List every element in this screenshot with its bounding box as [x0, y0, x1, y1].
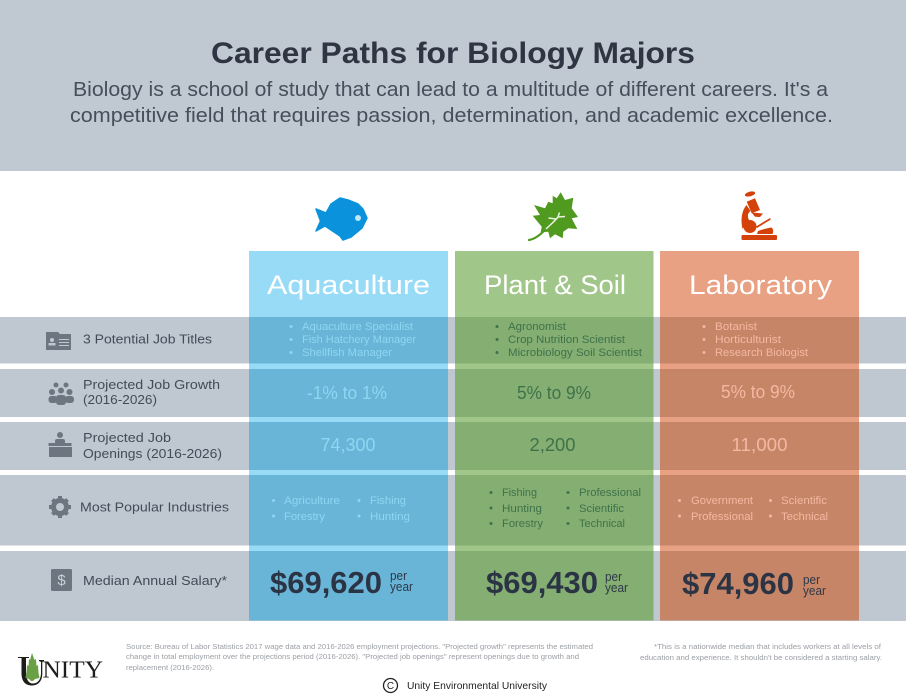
- icon: id card: [46, 332, 71, 350]
- row label: job growth: Projected Job Growth: [83, 377, 220, 392]
- source note: Source: Bureau of Labor Statistics 2017 wage data and 2016-2026 employment projections. "Projected growth" represents the estimated: [126, 642, 593, 651]
- panel: header band: [0, 0, 906, 171]
- intro text: [70, 79, 833, 127]
- industries: laboratory: Government: [691, 495, 753, 507]
- industries: aquaculture: Hunting: [370, 511, 410, 523]
- salary: laboratory: $74,960: [682, 566, 794, 601]
- industries: plant and soil: [490, 487, 641, 530]
- icon: microscope: [742, 190, 777, 240]
- icon: pine tree: [26, 653, 40, 681]
- row label: job titles: [46, 332, 213, 350]
- row label: industries: [49, 496, 230, 518]
- job growth: laboratory: 5% to 9%: [721, 382, 795, 402]
- heading: aquaculture: Aquaculture: [267, 270, 430, 300]
- job openings: aquaculture: 74,300: [320, 435, 376, 455]
- panel: comparison row bands: [0, 317, 906, 621]
- industries: aquaculture: [272, 495, 410, 523]
- row label: industries: Most Popular Industries: [80, 500, 230, 514]
- title: Career Paths for Biology Majors: [211, 37, 695, 70]
- job titles: plant and soil: Agronomist: [508, 321, 566, 333]
- industries: aquaculture: Agriculture: [284, 495, 340, 507]
- industries: laboratory: [678, 495, 828, 523]
- industries: plant and soil: Professional: [579, 487, 641, 499]
- industries: plant and soil: Forestry: [502, 518, 544, 530]
- copyright credit: C: [387, 681, 394, 692]
- row label: job growth: [48, 377, 220, 407]
- industries: laboratory: Technical: [781, 511, 828, 523]
- source note: replacement (2016-2026).: [126, 663, 214, 672]
- logo: Unity: [18, 653, 103, 686]
- salary: plant and soil: $69,430: [486, 565, 598, 600]
- job titles: laboratory: [702, 321, 808, 359]
- industries: plant and soil: Fishing: [502, 487, 537, 499]
- salary: plant and soil: year: [605, 581, 628, 595]
- job titles: plant and soil: Microbiology Soil Scientist: [508, 347, 642, 359]
- job titles: aquaculture: Shellfish Manager: [302, 347, 392, 359]
- industries: plant and soil: Scientific: [579, 503, 624, 515]
- industries: aquaculture: Forestry: [284, 511, 326, 523]
- icon: person at desk: [48, 432, 72, 457]
- panel: laboratory column: [660, 251, 859, 620]
- job openings: plant and soil: 2,200: [530, 435, 576, 455]
- salary: plant and soil: per: [605, 570, 622, 584]
- icon: maple leaf: [529, 192, 578, 240]
- salary: aquaculture: per: [390, 569, 407, 583]
- icon: fish: [316, 198, 367, 240]
- job titles: plant and soil: [496, 321, 642, 359]
- job openings: laboratory: 11,000: [732, 435, 788, 455]
- icon: people group: [48, 382, 74, 405]
- industries: laboratory: Professional: [691, 511, 753, 523]
- salary footnote: *This is a nationwide median that includes workers at all levels of: [654, 642, 882, 651]
- icon: U letter: [18, 657, 44, 686]
- job titles: laboratory: Botanist: [715, 321, 757, 333]
- salary: laboratory: per: [803, 573, 820, 587]
- salary footnote: [640, 642, 882, 662]
- heading: plant and soil: Plant & Soil: [484, 270, 626, 300]
- industries: aquaculture: Fishing: [370, 495, 406, 507]
- intro text: competitive field that requires passion, determination, and academic excellence.: [70, 105, 833, 127]
- salary: aquaculture: year: [390, 580, 413, 594]
- job growth: plant and soil: 5% to 9%: [517, 383, 591, 403]
- industries: plant and soil: Hunting: [502, 503, 542, 515]
- job titles: aquaculture: Fish Hatchery Manager: [302, 334, 416, 346]
- row label: job openings: Openings (2016-2026): [83, 446, 222, 461]
- job titles: plant and soil: Crop Nutrition Scientist: [508, 334, 625, 346]
- job titles: laboratory: Horticulturist: [715, 334, 781, 346]
- job titles: aquaculture: Aquaculture Specialist: [302, 321, 413, 333]
- row label: job growth: (2016-2026): [83, 392, 157, 407]
- job titles: aquaculture: [290, 321, 416, 359]
- row label: salary: [51, 569, 227, 591]
- salary: aquaculture: $69,620: [270, 565, 382, 600]
- job growth: aquaculture: -1% to 1%: [307, 383, 387, 403]
- row label: salary: $: [57, 572, 66, 589]
- logo: Unity: NITY: [42, 658, 103, 684]
- icon: dollar badge: [51, 569, 72, 591]
- intro text: Biology is a school of study that can lead to a multitude of different careers. It's a: [73, 79, 829, 101]
- heading: laboratory: Laboratory: [689, 270, 833, 300]
- panel: plant and soil column: [455, 251, 654, 620]
- salary footnote: education and experience. It shouldn't be considered a starting salary.: [640, 653, 882, 662]
- salary: laboratory: year: [803, 584, 826, 598]
- source note: change in total employment over the projections period (2016-2026). "Projected job openings" represent openings due to growth and: [126, 652, 579, 661]
- row label: salary: Median Annual Salary*: [83, 573, 227, 588]
- row label: job titles: 3 Potential Job Titles: [83, 332, 213, 346]
- industries: laboratory: Scientific: [781, 495, 828, 507]
- source note: [126, 642, 593, 672]
- copyright credit: Unity Environmental University: [407, 680, 548, 692]
- panel: aquaculture column: [249, 251, 448, 620]
- industries: plant and soil: Technical: [579, 518, 625, 530]
- icon: gear: [49, 496, 71, 518]
- job titles: laboratory: Research Biologist: [715, 347, 808, 359]
- row label: job openings: Projected Job: [83, 430, 171, 445]
- row label: job openings: [48, 430, 222, 461]
